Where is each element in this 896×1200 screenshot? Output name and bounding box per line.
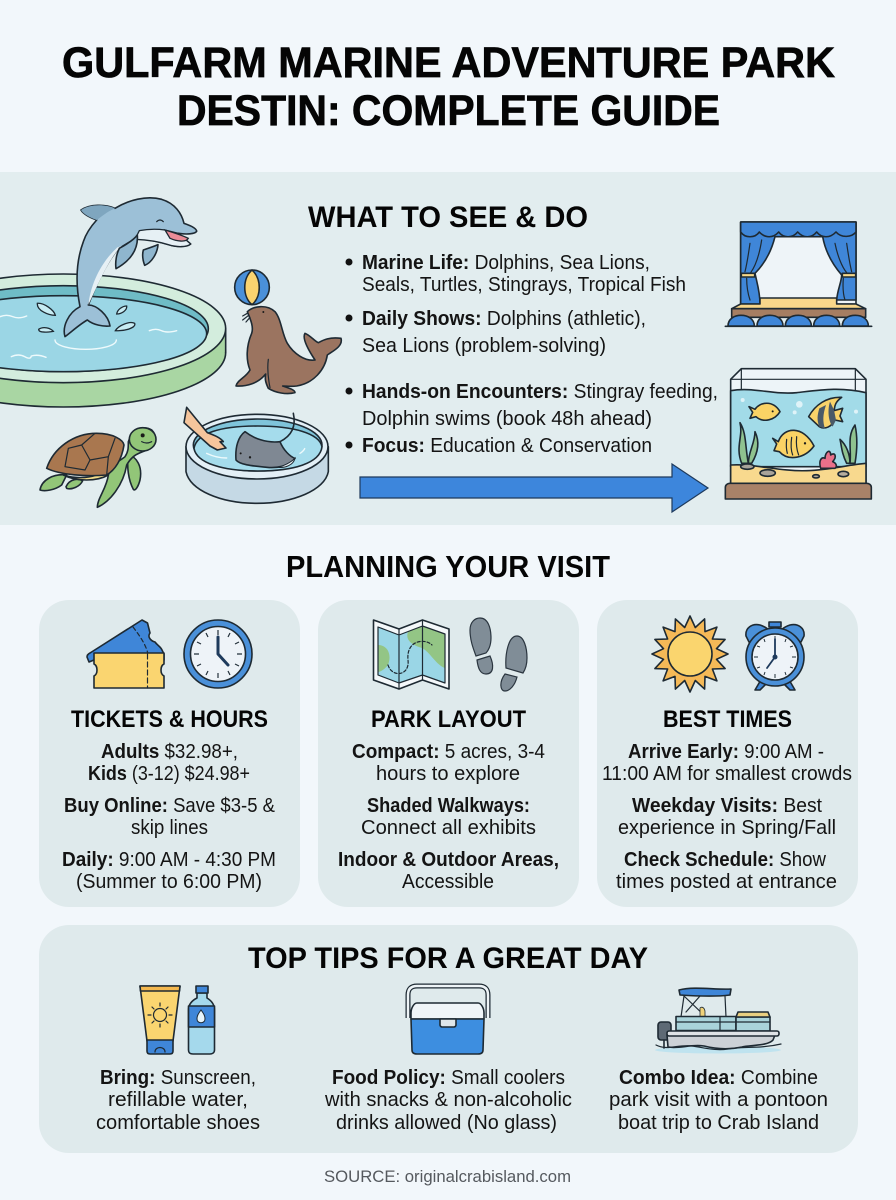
bullet list: highlights xyxy=(346,252,718,457)
icon: alarm clock xyxy=(746,622,804,690)
bullet list: highlights: Hands-on Encounters: Stingray feeding, xyxy=(362,381,718,403)
text: layout details: Shaded Walkways: xyxy=(367,795,530,817)
text: food policy: Food Policy: Small coolers xyxy=(332,1067,565,1089)
panel: top tips xyxy=(39,925,858,1153)
text: ticket details: (Summer to 6:00 PM) xyxy=(76,871,262,893)
text: food policy: with snacks & non-alcoholic xyxy=(324,1089,572,1111)
text: bring: refillable water, xyxy=(108,1089,248,1111)
arrow xyxy=(360,464,708,512)
bullet list: highlights: Dolphin swims (book 48h ahead) xyxy=(362,408,652,430)
text: timing details: Weekday Visits: Best xyxy=(632,795,822,817)
text: layout details: Compact: 5 acres, 3-4 xyxy=(352,741,545,763)
text: combo idea: boat trip to Crab Island xyxy=(618,1112,819,1134)
panel: what to see and do xyxy=(0,172,896,525)
text: timing details: times posted at entrance xyxy=(616,871,837,893)
text: bring xyxy=(96,1067,260,1134)
title: DESTIN: COMPLETE GUIDE xyxy=(177,87,720,135)
text: combo idea xyxy=(609,1067,828,1134)
icon: footprints xyxy=(470,618,527,691)
source line: SOURCE: originalcrabisland.com xyxy=(324,1167,571,1186)
heading: what to see and do: WHAT TO SEE & DO xyxy=(308,201,588,234)
illustration: dolphin leaping from pool xyxy=(0,198,226,407)
text: timing details xyxy=(602,741,852,893)
text: food policy xyxy=(324,1067,572,1134)
bullet list: highlights: Seals, Turtles, Stingrays, Tropical Fish xyxy=(362,274,686,296)
text: ticket details: Daily: 9:00 AM - 4:30 PM xyxy=(62,849,276,871)
text: ticket details: skip lines xyxy=(131,817,208,839)
text: bring: comfortable shoes xyxy=(96,1112,260,1134)
text: timing details: Check Schedule: Show xyxy=(624,849,827,871)
illustration: stingray touch pool xyxy=(184,407,328,503)
text: food policy: drinks allowed (No glass) xyxy=(336,1112,557,1134)
title xyxy=(62,39,835,135)
panel: park layout xyxy=(318,600,579,907)
icon: map xyxy=(374,620,449,689)
icon: aquarium xyxy=(725,369,871,499)
icon: clock xyxy=(184,620,252,688)
text: layout details xyxy=(338,741,559,893)
text: ticket details: Buy Online: Save $3-5 & xyxy=(64,795,276,817)
title: GULFARM MARINE ADVENTURE PARK xyxy=(62,39,835,87)
illustration: sea lion balancing ball xyxy=(235,270,341,394)
bullet list: highlights: Focus: Education & Conservation xyxy=(362,435,652,457)
text: ticket details xyxy=(62,741,276,893)
text: ticket details: Kids (3-12) $24.98+ xyxy=(88,763,250,785)
text: layout details: Connect all exhibits xyxy=(361,817,536,839)
panel: tickets and hours xyxy=(39,600,300,907)
text: layout details: Accessible xyxy=(402,871,494,893)
heading: tickets and hours: TICKETS & HOURS xyxy=(71,706,268,733)
icon: sun xyxy=(652,616,728,692)
text: timing details: Arrive Early: 9:00 AM - xyxy=(628,741,824,763)
bullet list: highlights: Daily Shows: Dolphins (athletic), xyxy=(362,308,646,330)
text: combo idea: Combo Idea: Combine xyxy=(619,1067,818,1089)
icon: pontoon boat xyxy=(655,988,781,1054)
heading: park layout: PARK LAYOUT xyxy=(371,706,526,733)
heading: top tips for a great day: TOP TIPS FOR A GREAT DAY xyxy=(248,942,648,975)
bullet list: highlights: Sea Lions (problem-solving) xyxy=(362,335,606,357)
illustration: sea turtle xyxy=(40,428,156,507)
text: bring: Bring: Sunscreen, xyxy=(100,1067,256,1089)
text: layout details: hours to explore xyxy=(376,763,520,785)
text: combo idea: park visit with a pontoon xyxy=(609,1089,828,1111)
text: ticket details: Adults $32.98+, xyxy=(101,741,238,763)
icon: theatre stage xyxy=(725,222,872,326)
text: timing details: experience in Spring/Fall xyxy=(618,817,836,839)
panel: best times xyxy=(597,600,858,907)
text: layout details: Indoor & Outdoor Areas, xyxy=(338,849,559,871)
heading: planning your visit: PLANNING YOUR VISIT xyxy=(286,549,610,584)
bullet list: highlights: Marine Life: Dolphins, Sea Lions, xyxy=(362,252,650,274)
heading: best times: BEST TIMES xyxy=(663,706,792,733)
icon: cooler xyxy=(408,986,488,1054)
icon: ticket xyxy=(87,620,164,688)
text: timing details: 11:00 AM for smallest crowds xyxy=(602,763,852,785)
icon: water bottle xyxy=(188,986,214,1054)
icon: sunscreen tube xyxy=(140,986,180,1054)
